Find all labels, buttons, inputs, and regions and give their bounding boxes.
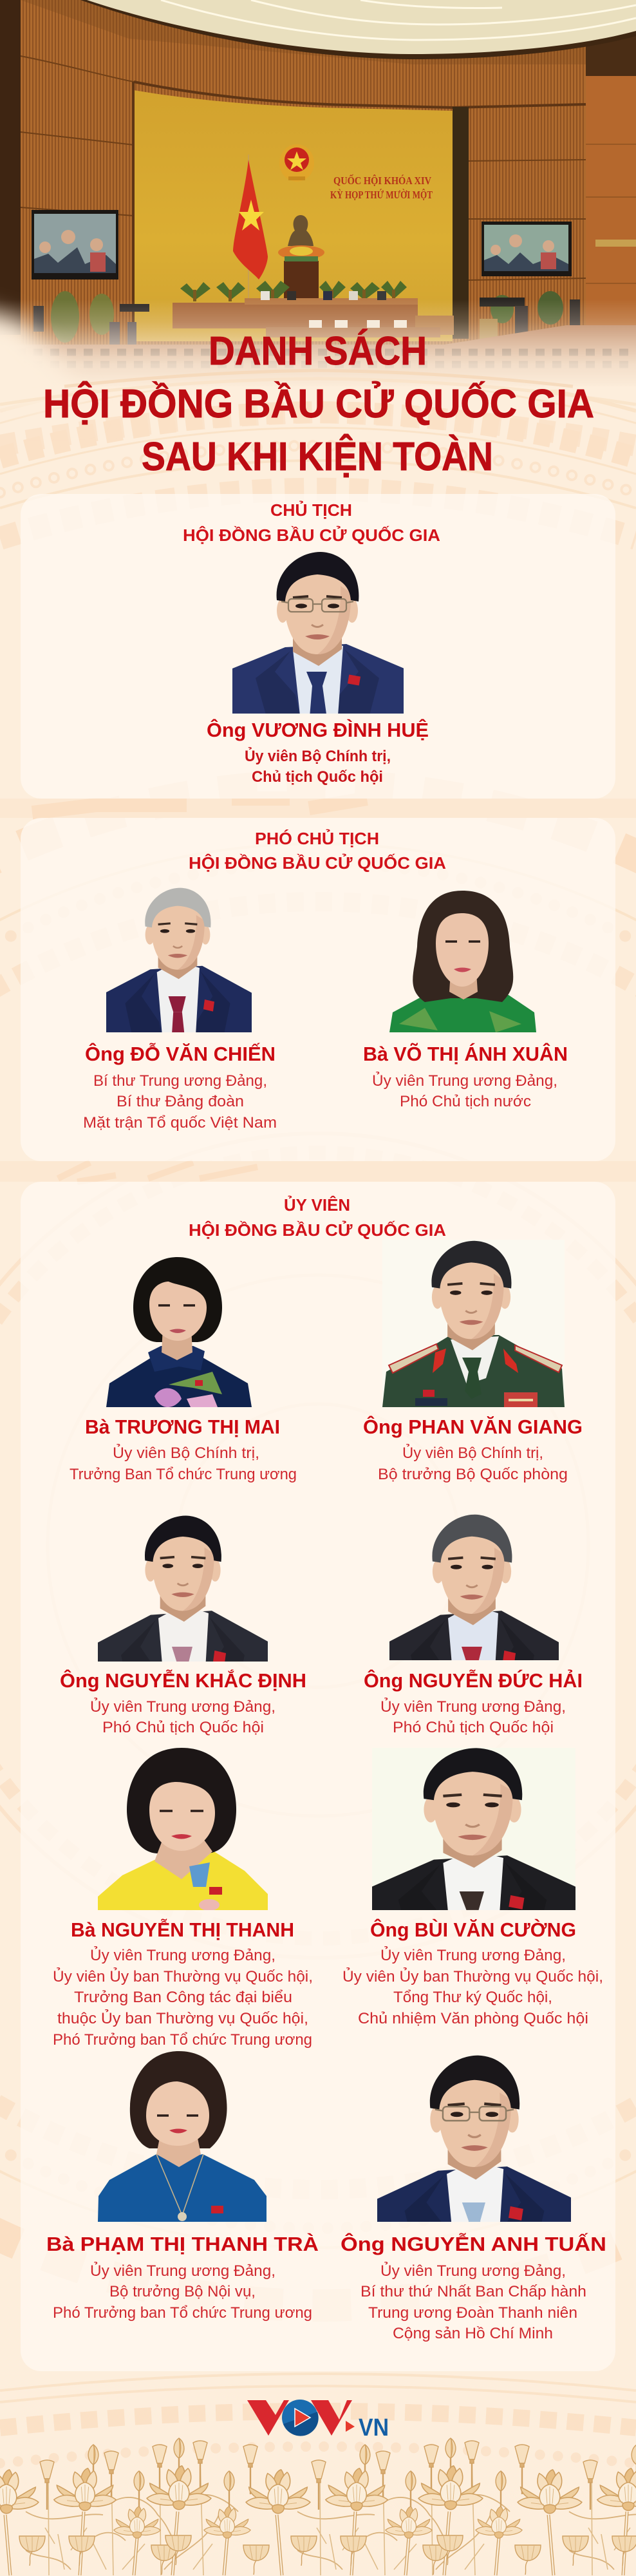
- hero: far left dark column: [0, 0, 21, 335]
- members heading: [189, 1195, 446, 1240]
- name: Đỗ Văn Chiến: Ông ĐỖ VĂN CHIẾN: [85, 1042, 276, 1065]
- portrait: Nguyễn Anh Tuấn: [377, 2056, 571, 2222]
- role: Nguyễn Anh Tuấn: Trung ương Đoàn Thanh niên: [368, 2304, 577, 2322]
- hero: left screen: [32, 210, 118, 279]
- portrait: Phan Văn Giang: [382, 1240, 565, 1407]
- name: Nguyễn Khắc Định: Ông NGUYỄN KHẮC ĐỊNH: [60, 1669, 306, 1692]
- portrait: Trương Thị Mai: [106, 1257, 252, 1407]
- role: Đỗ Văn Chiến: [83, 1072, 277, 1132]
- role: Nguyễn Khắc Định: Phó Chủ tịch Quốc hội: [102, 1719, 264, 1736]
- portrait: Nguyễn Khắc Định: [98, 1516, 268, 1662]
- role: Đỗ Văn Chiến: Mặt trận Tổ quốc Việt Nam: [83, 1114, 277, 1132]
- role: Bùi Văn Cường: Ủy viên Trung ương Đảng,: [380, 1946, 566, 1964]
- name: Nguyễn Thị Thanh: Bà NGUYỄN THỊ THANH: [71, 1918, 294, 1941]
- role: Vương Đình Huệ: [245, 746, 391, 786]
- chairman heading: CHỦ TỊCH: [270, 500, 352, 520]
- hero: yellow wall panel: [132, 82, 586, 341]
- role: Nguyễn Anh Tuấn: Ủy viên Trung ương Đảng,: [380, 2261, 566, 2280]
- name: Phan Văn Giang: Ông PHAN VĂN GIANG: [363, 1415, 583, 1438]
- hero: plants: [180, 281, 407, 303]
- role: Phạm Thị Thanh Trà: Ủy viên Trung ương Đảng,: [90, 2261, 276, 2280]
- role: Nguyễn Đức Hải: Ủy viên Trung ương Đảng,: [380, 1697, 566, 1716]
- footer lotus illustration: [0, 2438, 636, 2575]
- role: Nguyễn Thị Thanh: Phó Trưởng ban Tổ chức Trung ương: [53, 2031, 312, 2049]
- role: Nguyễn Thị Thanh: Ủy viên Ủy ban Thường vụ Quốc hội,: [53, 1967, 313, 1985]
- role: Nguyễn Thị Thanh: [53, 1946, 313, 2049]
- role: Phạm Thị Thanh Trà: Phó Trưởng ban Tổ chức Trung ương: [53, 2304, 312, 2322]
- hero: wall caption: KỲ HỌP THỨ MƯỜI MỘT: [330, 189, 433, 201]
- role: Bùi Văn Cường: Tổng Thư ký Quốc hội,: [393, 1989, 552, 2006]
- name: Nguyễn Anh Tuấn: Ông NGUYỄN ANH TUẤN: [341, 2232, 606, 2255]
- logo: VOV.VN: VN: [359, 2414, 389, 2441]
- hero: national emblem: [279, 144, 314, 182]
- role: Nguyễn Thị Thanh: thuộc Ủy ban Thường vụ Quốc hội,: [57, 2009, 308, 2027]
- vice chairmen heading: [189, 828, 446, 873]
- role: Nguyễn Đức Hải: [380, 1697, 566, 1736]
- portrait: Phạm Thị Thanh Trà: [98, 2051, 267, 2222]
- portrait: Vương Đình Huệ: [232, 552, 404, 714]
- portrait: Nguyễn Thị Thanh: [98, 1748, 268, 1911]
- hero: fade into background: [0, 299, 636, 390]
- members heading: ỦY VIÊN: [284, 1195, 350, 1215]
- hero: right screen: [482, 222, 572, 276]
- hero: decorative plants and cameras: [33, 291, 580, 345]
- role: Bùi Văn Cường: Ủy viên Ủy ban Thường vụ Quốc hội,: [342, 1967, 603, 1985]
- panel: members: [21, 1182, 636, 2371]
- role: Phạm Thị Thanh Trà: Bộ trưởng Bộ Nội vụ,: [109, 2283, 256, 2300]
- panel: chairman: [21, 494, 615, 799]
- members heading: HỘI ĐỒNG BẦU CỬ QUỐC GIA: [189, 1220, 446, 1240]
- role: Phan Văn Giang: [378, 1443, 568, 1483]
- role: Nguyễn Anh Tuấn: [360, 2261, 586, 2342]
- chairman heading: HỘI ĐỒNG BẦU CỬ QUỐC GIA: [183, 525, 440, 545]
- hero: bust and podium: [278, 215, 324, 319]
- hero: wall caption: [330, 174, 433, 201]
- portrait: Bùi Văn Cường: [372, 1748, 575, 1910]
- title: SAU KHI KIỆN TOÀN: [142, 435, 493, 479]
- role: Nguyễn Anh Tuấn: Bí thư thứ Nhất Ban Chấp hành: [360, 2283, 586, 2300]
- name: Võ Thị Ánh Xuân: Bà VÕ THỊ ÁNH XUÂN: [363, 1042, 568, 1065]
- role: Nguyễn Thị Thanh: Ủy viên Trung ương Đảng,: [90, 1946, 276, 1964]
- role: Nguyễn Đức Hải: Phó Chủ tịch Quốc hội: [393, 1719, 554, 1736]
- hero: wall caption: QUỐC HỘI KHÓA XIV: [333, 174, 432, 187]
- name: Trương Thị Mai: Bà TRƯƠNG THỊ MAI: [85, 1416, 280, 1438]
- role: Nguyễn Khắc Định: [90, 1697, 276, 1736]
- role: Nguyễn Khắc Định: Ủy viên Trung ương Đảng,: [90, 1697, 276, 1716]
- role: Đỗ Văn Chiến: Bí thư Trung ương Đảng,: [93, 1072, 267, 1090]
- portrait: Võ Thị Ánh Xuân: [389, 891, 536, 1032]
- hero photo: National Assembly hall: [0, 0, 636, 412]
- title: HỘI ĐỒNG BẦU CỬ QUỐC GIA: [43, 382, 594, 426]
- role: Võ Thị Ánh Xuân: Ủy viên Trung ương Đảng,: [372, 1071, 557, 1090]
- role: Vương Đình Huệ: Ủy viên Bộ Chính trị,: [245, 746, 391, 765]
- vice chairmen heading: HỘI ĐỒNG BẦU CỬ QUỐC GIA: [189, 853, 446, 873]
- role: Bùi Văn Cường: Chủ nhiệm Văn phòng Quốc hội: [358, 2010, 588, 2027]
- name: Nguyễn Đức Hải: Ông NGUYỄN ĐỨC HẢI: [364, 1669, 583, 1692]
- role: Phạm Thị Thanh Trà: [53, 2261, 312, 2322]
- role: Trương Thị Mai: Trưởng Ban Tổ chức Trung ương: [70, 1466, 297, 1483]
- hero: wood wall: [21, 0, 586, 345]
- portrait: Đỗ Văn Chiến: [106, 887, 252, 1032]
- hero: flag: [233, 155, 268, 309]
- role: Đỗ Văn Chiến: Bí thư Đảng đoàn: [117, 1093, 244, 1110]
- role: Nguyễn Thị Thanh: Trưởng Ban Công tác đại biểu: [74, 1989, 292, 2006]
- role: Phan Văn Giang: Ủy viên Bộ Chính trị,: [402, 1443, 543, 1462]
- role: Võ Thị Ánh Xuân: Phó Chủ tịch nước: [400, 1093, 531, 1110]
- hero: presidium table: [173, 291, 454, 337]
- role: Võ Thị Ánh Xuân: [372, 1071, 557, 1110]
- hero: far right wall: [586, 32, 636, 348]
- drum band over hero fade: [0, 370, 636, 446]
- hero: audience seats: [0, 325, 636, 386]
- logo: VOV.VN: [247, 2400, 389, 2441]
- name: Vương Đình Huệ: Ông VƯƠNG ĐÌNH HUỆ: [207, 718, 429, 741]
- role: Nguyễn Anh Tuấn: Cộng sản Hồ Chí Minh: [393, 2325, 553, 2342]
- vice chairmen heading: PHÓ CHỦ TỊCH: [255, 828, 379, 848]
- role: Vương Đình Huệ: Chủ tịch Quốc hội: [252, 768, 383, 786]
- role: Trương Thị Mai: Ủy viên Bộ Chính trị,: [113, 1443, 259, 1462]
- hero: ceiling: [80, 0, 636, 59]
- title: DANH SÁCH: [209, 329, 427, 374]
- panel: vice chairmen: [21, 818, 615, 1161]
- name: Phạm Thị Thanh Trà: Bà PHẠM THỊ THANH TRÀ: [46, 2233, 319, 2255]
- name: Bùi Văn Cường: Ông BÙI VĂN CƯỜNG: [370, 1918, 576, 1941]
- portrait: Nguyễn Đức Hải: [389, 1515, 559, 1660]
- role: Phan Văn Giang: Bộ trưởng Bộ Quốc phòng: [378, 1466, 568, 1483]
- role: Trương Thị Mai: [70, 1443, 297, 1483]
- chairman heading: [183, 500, 440, 545]
- role: Bùi Văn Cường: [342, 1946, 603, 2027]
- title: [43, 329, 594, 479]
